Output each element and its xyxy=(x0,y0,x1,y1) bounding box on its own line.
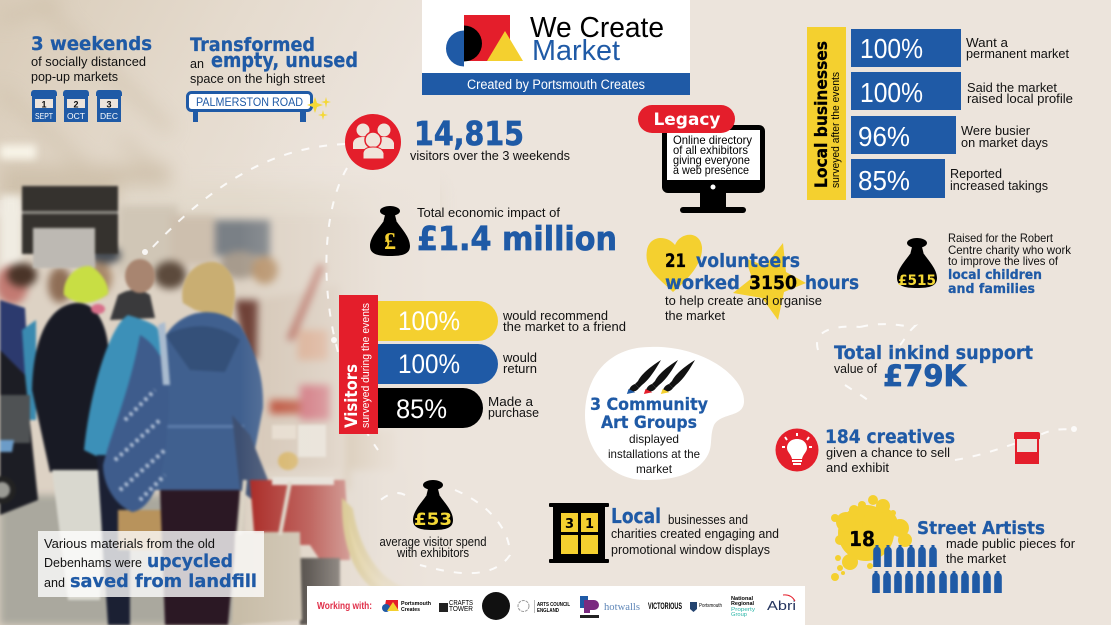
icons: market date stalls: 2 xyxy=(73,100,79,110)
text: transformed: Transformed xyxy=(190,34,315,56)
panel: visitors xyxy=(339,295,626,434)
panel: visitors: surveyed during the events xyxy=(360,303,372,428)
text: transformed xyxy=(190,34,358,86)
legacy monitor: giving everyone xyxy=(673,153,750,167)
icons: market date stalls xyxy=(31,90,122,122)
logo panel: We Create xyxy=(530,12,664,44)
callout: upcycled materials: Debenhams were xyxy=(44,555,142,570)
stat: inkind support xyxy=(834,342,1033,393)
logo: black circle xyxy=(482,592,510,620)
icons: market date stalls: 3 xyxy=(106,100,112,110)
stat: 18 street artists: made public pieces for xyxy=(946,536,1076,551)
text: 3 weekends: 3 weekends xyxy=(31,33,152,55)
panel: local businesses: Were busier xyxy=(961,123,1031,138)
logo: Abri xyxy=(767,595,796,613)
stat: volunteers: to help create and organise xyxy=(665,293,822,308)
logo: Portsmouth Creates xyxy=(382,600,432,613)
stat: 184 creatives: given a chance to sell xyxy=(826,445,950,460)
text: transformed: space on the high street xyxy=(190,71,325,86)
panel: local businesses: on market days xyxy=(961,135,1048,150)
legacy monitor: Legacy xyxy=(654,110,720,130)
logo: Portsmouth crest xyxy=(690,602,722,612)
stat: inkind support: value of xyxy=(834,361,877,376)
stat: community art groups palette xyxy=(585,347,744,480)
icon: visitors red circle xyxy=(345,114,401,170)
stat: 184 creatives: 184 creatives xyxy=(825,426,955,448)
panel: visitors: 100% xyxy=(398,306,460,336)
stat: £53 spend: with exhibitors xyxy=(396,546,469,560)
panel: local businesses: 85% xyxy=(858,165,910,196)
legacy monitor xyxy=(638,105,765,213)
callout: upcycled materials: saved from landfill xyxy=(70,571,257,592)
stat: 18 street artists xyxy=(831,495,1076,593)
stat: window displays: charities created engaging and xyxy=(611,526,779,541)
panel: local businesses: 96% xyxy=(858,121,910,152)
text: transformed: an xyxy=(190,56,204,71)
stat: total economic impact: £1.4 million xyxy=(417,219,617,258)
icon: Palmerston Road sign: PALMERSTON ROAD xyxy=(196,97,303,109)
stat: community art groups palette: Art Groups xyxy=(601,413,697,433)
stat: 184 creatives: and exhibit xyxy=(826,460,889,475)
callout: upcycled materials xyxy=(38,531,264,597)
panel: local businesses: 100% xyxy=(860,33,923,64)
stat: £53 spend: £53 xyxy=(414,510,452,530)
panel: local businesses: permanent market xyxy=(966,46,1069,61)
text: 3 weekends: pop-up markets xyxy=(31,69,118,84)
stat: £515 charity: to improve the lives of xyxy=(948,254,1059,268)
logo panel: Created by Portsmouth Creates xyxy=(467,77,645,92)
panel: local businesses: Said the market xyxy=(967,80,1057,95)
dashed journey lines xyxy=(142,144,1077,573)
stat: £53 spend xyxy=(380,480,487,560)
stat: total economic impact: Total economic impact of xyxy=(417,205,560,220)
logo: National Regional Property Group: National xyxy=(731,596,753,602)
panel: local businesses: Want a xyxy=(966,35,1009,50)
stat: community art groups palette: displayed xyxy=(629,432,679,446)
callout: upcycled materials: upcycled xyxy=(147,551,233,572)
stat: volunteers: hours xyxy=(805,272,859,294)
panel: visitors: 100% xyxy=(398,349,460,379)
text: 3 weekends xyxy=(31,33,152,84)
text: 3 weekends: of socially distanced xyxy=(31,54,146,69)
legacy monitor: Online directory xyxy=(673,133,752,147)
logo: National Regional Property Group: Regional xyxy=(731,601,754,607)
panel: visitors: Made a xyxy=(488,394,534,409)
stat: £515 charity: and families xyxy=(948,281,1035,297)
icon: paintbrushes xyxy=(628,360,695,393)
logo: Arts Council England: ARTS COUNCIL xyxy=(537,602,571,608)
logo: Portsmouth Creates: Portsmouth xyxy=(401,601,432,607)
callout: upcycled materials: Various materials from the old xyxy=(44,536,215,551)
logo: Portsmouth Creates: Creates xyxy=(401,607,420,613)
logo: Arts Council England: ENGLAND xyxy=(537,608,559,614)
icon: Palmerston Road sign xyxy=(188,92,331,122)
legacy monitor: a web presence xyxy=(673,163,749,177)
stat: volunteers: 3150 xyxy=(749,272,797,294)
panel: local businesses: Local businesses xyxy=(812,41,832,188)
panel: local businesses: Reported xyxy=(950,166,1002,181)
logo panel: Market xyxy=(532,35,620,67)
stat: 18 street artists: the market xyxy=(946,551,1006,566)
partner logo bar xyxy=(307,586,805,625)
text: transformed: empty, unused xyxy=(211,48,358,72)
stat: volunteers: volunteers xyxy=(696,250,800,272)
icons: market date stalls: DEC xyxy=(100,111,118,121)
stat: £515 charity: Centre charity who work xyxy=(948,243,1072,257)
stat: total economic impact xyxy=(370,205,617,258)
logo: Hotwalls: hotwalls xyxy=(604,602,640,613)
stat: 14,815 visitors: 14,815 xyxy=(414,114,524,153)
panel: visitors: would xyxy=(502,350,537,365)
stat: £515 charity: local children xyxy=(948,267,1042,283)
logo: National Regional Property Group xyxy=(731,596,755,618)
panel: visitors: 85% xyxy=(396,394,447,424)
logo: Victorious: VICTORIOUS xyxy=(648,601,682,611)
icons: market date stalls: 1 xyxy=(41,100,47,110)
stat: inkind support: Total inkind support xyxy=(834,342,1033,364)
partner logo bar: Working with: xyxy=(317,601,372,612)
stat: £515 charity: £515 xyxy=(898,273,936,289)
stat: 18 street artists: 18 xyxy=(849,527,875,551)
logo: Portsmouth crest: Portsmouth xyxy=(699,603,722,609)
stat: 14,815 visitors: visitors over the 3 weekends xyxy=(410,148,570,163)
legacy monitor: of all exhibitors xyxy=(673,143,748,157)
logo: National Regional Property Group: Group xyxy=(731,612,747,618)
stat: window displays xyxy=(549,503,779,563)
panel: local businesses: increased takings xyxy=(950,178,1048,193)
stat: window displays: businesses and xyxy=(668,512,748,527)
logo: National Regional Property Group: Property xyxy=(731,607,755,613)
stat: volunteers: worked xyxy=(665,272,740,294)
stat: volunteers: the market xyxy=(665,308,725,323)
icon: red market stall xyxy=(1014,432,1040,464)
stat: £53 spend: average visitor spend xyxy=(380,535,487,549)
stat: community art groups palette: market xyxy=(636,462,673,476)
stat: window displays: promotional window displays xyxy=(611,542,770,557)
logo: Crafts in the Tower xyxy=(439,600,473,613)
stat: window displays: Local xyxy=(611,504,661,528)
panel: visitors: would recommend xyxy=(502,308,608,323)
panel: local businesses xyxy=(807,27,1073,200)
stat: £515 charity: Raised for the Robert xyxy=(948,231,1054,245)
stat: total economic impact: £ xyxy=(384,229,396,255)
logo panel xyxy=(422,0,690,95)
logo: purple mark xyxy=(580,596,599,618)
callout: upcycled materials: and xyxy=(44,575,65,590)
stat: community art groups palette: 3 Community xyxy=(590,395,708,415)
icons: market date stalls: SEPT xyxy=(35,111,53,121)
panel: local businesses: 100% xyxy=(860,77,923,108)
panel: local businesses: surveyed after the events xyxy=(830,72,842,188)
background photo: market crowd xyxy=(0,0,440,625)
stat: £515 charity xyxy=(897,231,1072,297)
panel: visitors: return xyxy=(503,361,537,376)
stat: 14,815 visitors xyxy=(410,114,570,163)
stat: 184 creatives xyxy=(776,426,955,475)
stat: window displays: 1 xyxy=(585,517,594,532)
logo: Arts Council England xyxy=(518,600,571,614)
panel: visitors: the market to a friend xyxy=(503,319,626,334)
stat: community art groups palette: installations at the xyxy=(608,447,700,461)
stat: window displays: 3 xyxy=(565,517,574,532)
logo: Crafts in the Tower: TOWER xyxy=(449,606,473,613)
icon: spray cans xyxy=(872,545,1002,593)
stat: volunteers xyxy=(647,235,859,323)
icons: market date stalls: OCT xyxy=(67,111,85,121)
panel: local businesses: raised local profile xyxy=(967,91,1073,106)
panel: visitors: purchase xyxy=(488,405,539,420)
stat: inkind support: £79K xyxy=(883,359,968,393)
logo: Crafts in the Tower: CRAFTS xyxy=(449,600,473,607)
stat: volunteers: 21 xyxy=(665,250,686,272)
stat: 18 street artists: Street Artists xyxy=(917,518,1045,539)
logo: Abri: Abri xyxy=(767,598,796,613)
panel: visitors: Visitors xyxy=(342,364,362,428)
